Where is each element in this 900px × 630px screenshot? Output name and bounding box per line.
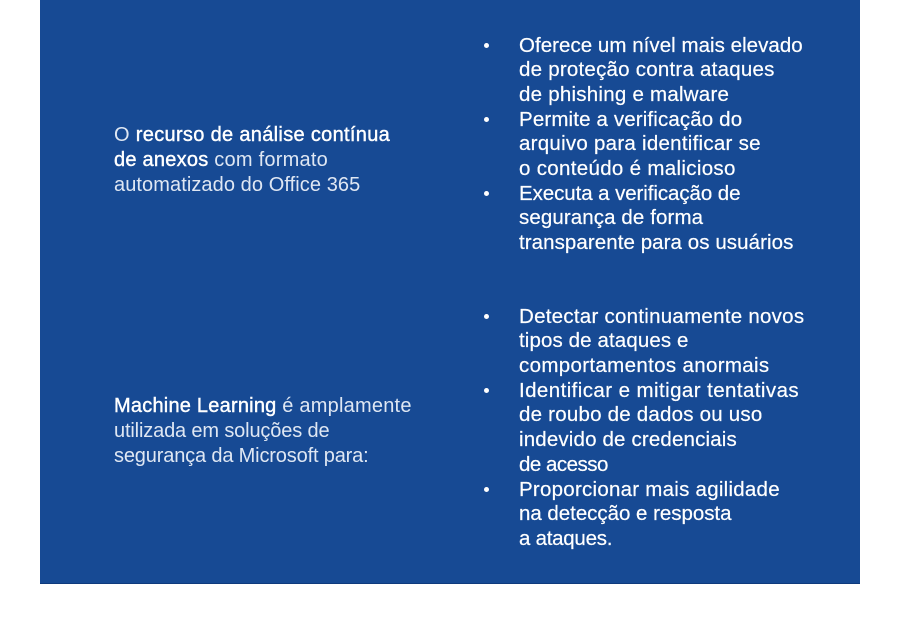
bullet list: machine learning uses: de acesso (519, 453, 608, 476)
bullet list: attachment analysis benefits: o conteúdo é malicioso (519, 157, 736, 180)
bullet list: machine learning uses: de roubo de dados ou uso (519, 403, 763, 426)
text block: machine learning: utilizada em soluções de (114, 420, 329, 442)
text block: continuous attachment analysis: de anexos com formato (114, 148, 328, 170)
text block: machine learning: Machine Learning é amplamente (114, 394, 412, 416)
bullet list: attachment analysis benefits (484, 34, 803, 254)
bullet list: attachment analysis benefits: Permite a verificação do (519, 108, 742, 131)
bullet list: machine learning uses: Detectar continuamente novos (519, 305, 804, 328)
bullet list: attachment analysis benefits: de phishing e malware (519, 83, 729, 106)
bullet list: machine learning uses: Identificar e mitigar tentativas (519, 379, 799, 402)
bullet list: attachment analysis benefits: Executa a verificação de (519, 182, 740, 205)
bullet list: attachment analysis benefits: segurança de forma (519, 206, 703, 229)
text block: machine learning: segurança da Microsoft para: (114, 444, 369, 466)
text block: continuous attachment analysis: automatizado do Office 365 (114, 174, 360, 196)
bullet list: attachment analysis benefits: transparente para os usuários (519, 231, 793, 254)
bullet list: machine learning uses: comportamentos anormais (519, 354, 770, 377)
bullet list: machine learning uses (484, 305, 804, 550)
bullet list: attachment analysis benefits: de proteção contra ataques (519, 58, 775, 81)
text block: machine learning (114, 394, 412, 466)
bullet list: machine learning uses: a ataques. (519, 527, 612, 550)
bullet list: machine learning uses: Proporcionar mais agilidade (519, 478, 780, 501)
bullet list: machine learning uses: tipos de ataques e (519, 329, 689, 352)
bullet list: machine learning uses: indevido de credenciais (519, 428, 737, 451)
bullet list: attachment analysis benefits: arquivo para identificar se (519, 132, 761, 155)
bullet list: attachment analysis benefits: Oferece um nível mais elevado (519, 34, 803, 56)
bullet list: machine learning uses: na detecção e resposta (519, 502, 731, 525)
text block: continuous attachment analysis (114, 124, 390, 196)
text block: continuous attachment analysis: O recurso de análise contínua (114, 124, 390, 146)
